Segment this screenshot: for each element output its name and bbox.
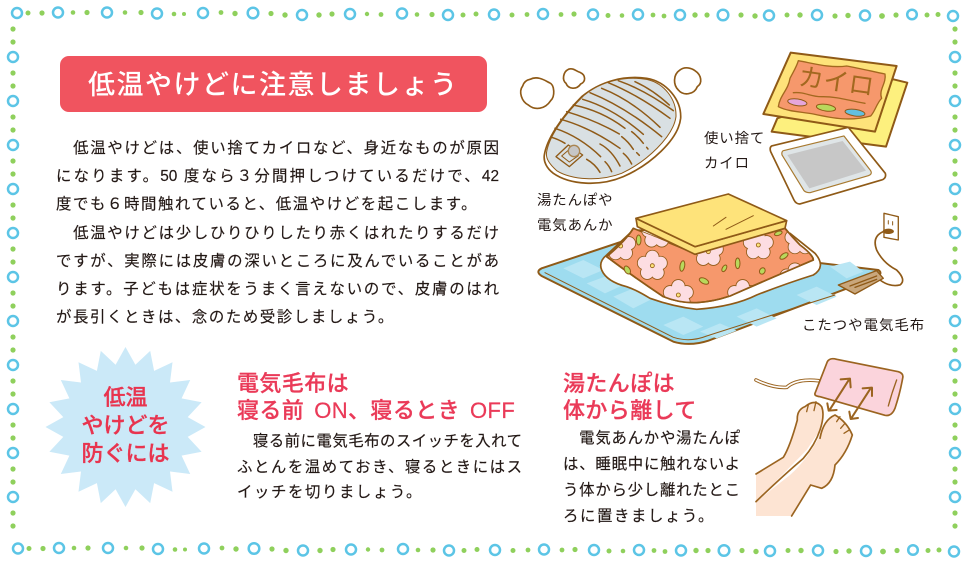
tip 1 text [237,432,522,501]
tip 1 text: 寝る前に電気毛布のスイッチを入れて [253,433,522,450]
label: hot water bottle [537,192,613,234]
tip 2 text: ろに置きましょう。 [563,508,715,525]
body text: about low-temperature burns: ります。子どもは症状をうまく言えないので、皮膚のはれ [56,281,499,298]
title banner: 低温やけどに注意しましょう [88,70,458,100]
tip 2 text: は、睡眠中に触れないよ [563,456,740,473]
body text: about low-temperature burns: が長引くときは、念のため受診しましょう。 [56,309,395,326]
tip 2 heading: 体から離して [563,398,697,423]
starburst badge: how to prevent [46,347,206,507]
illustration: disposable heat pack: カイロ [796,63,876,102]
badge text: 防ぐには [81,441,170,466]
badge text: やけどを [81,413,170,438]
title banner [60,56,487,112]
tip 2 text [563,429,740,525]
label: hot water bottle: 湯たんぽや [537,193,613,209]
label: disposable heat pack: カイロ [704,156,750,172]
tip 2 heading [563,371,697,423]
body text: about low-temperature burns: 低温やけどは、使い捨てカイロなど、身近なものが原因 [73,140,499,157]
tip 2 heading: 湯たんぽは [563,371,675,396]
body text: about low-temperature burns: ですが、実際には皮膚の深いところに及んでいることがあ [56,253,499,270]
tip 1 heading [237,371,515,423]
tip 2 text: う体から少し離れたとこ [563,482,740,499]
label: disposable heat pack [704,130,765,172]
tip 1 heading: 電気毛布は [237,371,349,396]
tip 2 text: 電気あんかや湯たんぽ [579,430,740,447]
body text: about low-temperature burns: 低温やけどは少しひりひりしたり赤くはれたりするだけ [73,225,499,242]
tip 1 heading: 寝る前 ON、寝るとき OFF [237,398,515,423]
body text: about low-temperature burns [56,140,499,326]
badge text [81,385,170,466]
body text: about low-temperature burns: 度でも６時間触れていると、低温やけどを起こします。 [56,196,478,213]
badge text: 低温 [103,385,148,410]
tip 1: electric blanket [237,371,522,501]
tip 2: hot water bottle [563,371,740,525]
label: disposable heat pack: 使い捨て [704,131,765,147]
illustration: kotatsu on electric blanket [537,193,904,345]
tip 1 text: イッチを切りましょう。 [237,484,423,501]
label: hot water bottle: 電気あんか [537,218,613,234]
tip 1 text: ふとんを温めておき、寝るときにはス [237,458,522,476]
body text: about low-temperature burns: になります。50 度なら３分間押しつけているだけで、42 [56,168,499,185]
label: kotatsu and electric blanket: こたつや電気毛布 [802,318,925,334]
